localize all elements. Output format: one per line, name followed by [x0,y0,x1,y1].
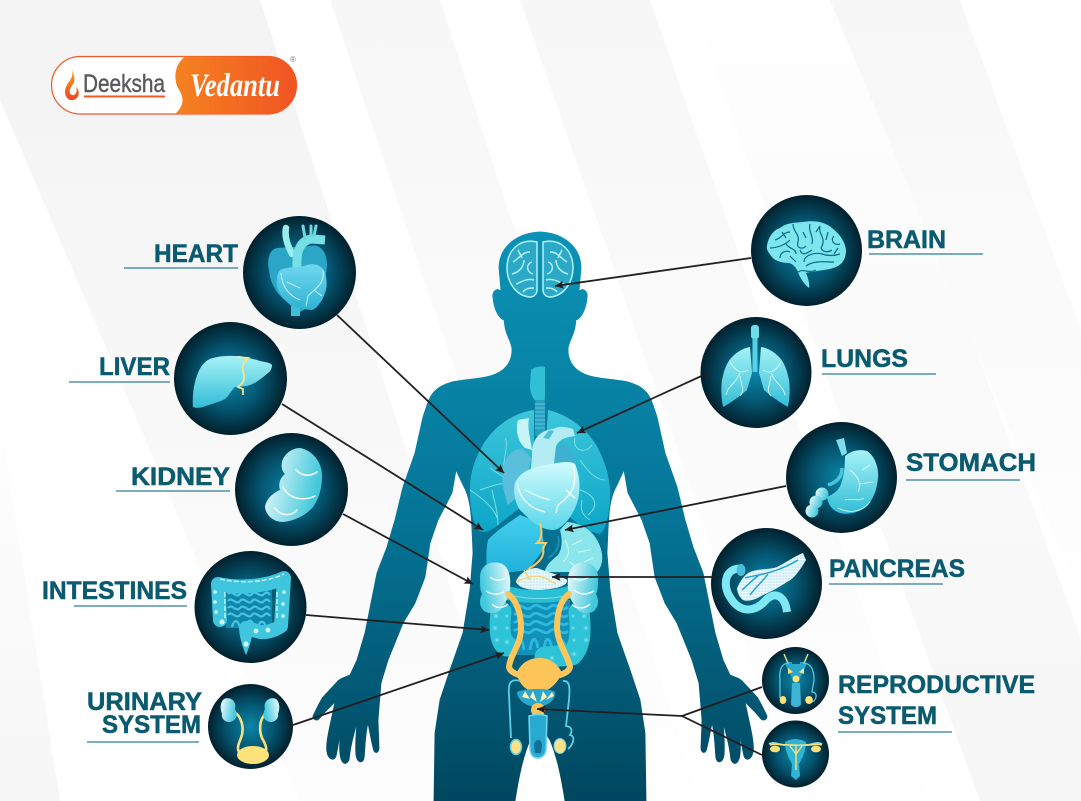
organ disc: heart [243,216,356,329]
body organ: hepatic vein [522,523,546,580]
organ disc: lungs [700,317,812,428]
label: kidney: KIDNEY [131,463,230,491]
body organ: pancreas [516,568,567,590]
heart: auricles [502,449,531,505]
logo: orange panel [175,56,297,114]
heart: aorta [517,418,532,450]
organ disc: female reproductive [762,720,829,788]
body organ: kidneys [480,562,598,613]
label: urinary system: URINARY [87,688,202,716]
arrow: kidney [343,514,473,584]
label: reproductive system [838,671,1035,732]
label: intestines: INTESTINES [42,577,187,605]
label: liver [69,353,170,382]
label: lungs: LUNGS [821,345,908,373]
organ disc: male reproductive [762,647,829,714]
label: urinary system: SYSTEM [102,711,201,739]
arrow: intestines [306,615,489,630]
label: stomach: STOMACH [906,449,1036,477]
organ disc: urinary system [208,684,293,769]
arrow: liver [282,404,483,530]
logo: registered mark: ® [290,55,296,64]
logo: Deeksha Vedantu [52,55,297,114]
organ disc: kidney [235,433,348,546]
body organ: colon and small intestine [491,584,590,662]
body organ: liver [486,515,545,575]
organ disc: brain [751,195,862,306]
body organ: stomach [545,522,602,572]
label: urinary system [87,688,202,742]
arrow: urinary system [293,653,504,725]
label: reproductive system: REPRODUCTIVE [838,671,1035,699]
label: heart: HEART [154,240,238,268]
body organ: lungs [470,410,610,534]
arrow: stomach [565,486,786,530]
label: brain: BRAIN [867,226,946,254]
organ disc: intestines [194,551,306,663]
label: pancreas: PANCREAS [829,555,965,583]
arrow: reproductive system [537,687,762,755]
arrow: heart [337,315,504,473]
body organ: brain [507,241,573,297]
arrow: pancreas [552,576,717,578]
organ disc: liver [174,322,287,435]
arrow: lungs [577,373,708,433]
logo: Vedantu wordmark: Vedantu [190,68,280,104]
logo: flame icon [65,69,79,100]
label: reproductive system: SYSTEM [838,702,937,730]
logo: Deeksha wordmark: Deeksha [83,70,165,98]
organ disc: stomach [786,422,897,533]
body organ: trachea [530,366,545,436]
arrow: brain [555,258,751,286]
organ disc: pancreas [711,528,822,639]
heart: ventricle [514,462,580,530]
label: liver: LIVER [99,353,170,381]
body organ: heart [502,418,580,530]
label: brain [867,226,983,254]
body organ: urinary tract [508,594,570,692]
human body silhouette [313,232,767,801]
logo: underline [84,96,165,98]
body organ: reproductive system [509,680,573,758]
